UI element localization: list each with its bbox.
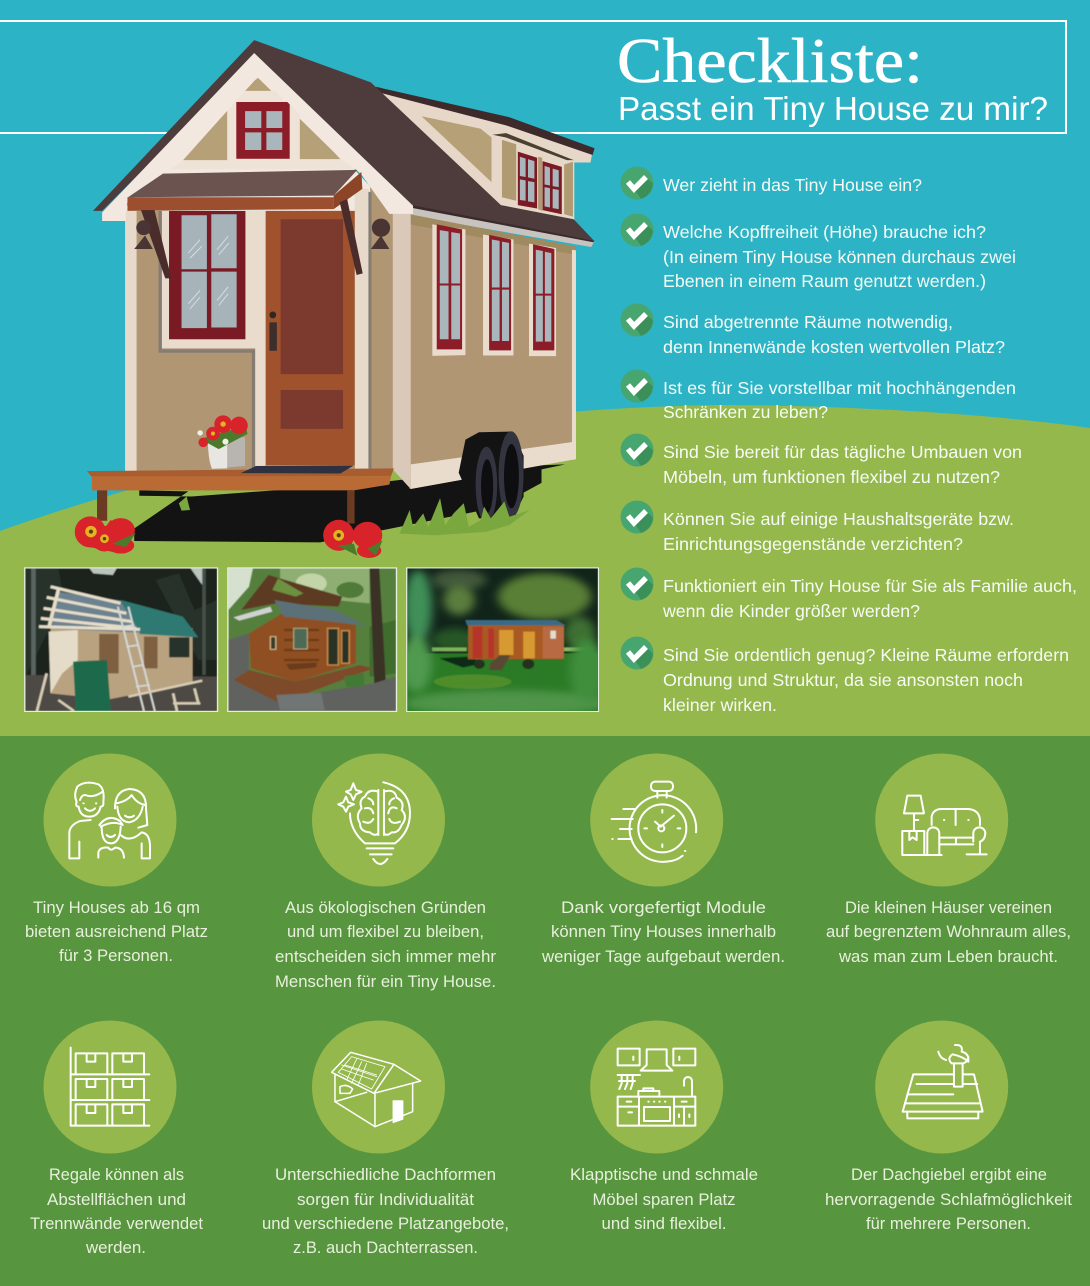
dormer backing bbox=[371, 82, 592, 221]
text: family: bieten ausreichend Platz bbox=[25, 922, 208, 941]
background: green hill bbox=[0, 405, 1090, 740]
checklist item 6 bbox=[620, 500, 1014, 554]
text: stopwatch: weniger Tage aufgebaut werden. bbox=[541, 947, 785, 966]
checklist item 8: Sind Sie ordentlich genug? Kleine Räume erfordern bbox=[663, 645, 1069, 665]
checklist item 5: Möbeln, um funktionen flexibel zu nutzen? bbox=[663, 467, 1000, 487]
porch deck bbox=[87, 465, 394, 523]
checklist item 3 bbox=[620, 304, 1005, 357]
icon: kitchen bbox=[590, 1020, 723, 1154]
text: kitchen: Klapptische und schmale bbox=[570, 1165, 758, 1184]
text: brain light bulb: Aus ökologischen Gründen bbox=[285, 898, 486, 917]
title: Checkliste: bbox=[617, 25, 923, 96]
checklist item 3: denn Innenwände kosten wertvollen Platz? bbox=[663, 337, 1005, 357]
red flowers right bbox=[323, 520, 383, 558]
checklist item 1 bbox=[620, 166, 922, 200]
checklist item 2: (In einem Tiny House können durchaus zwei bbox=[663, 247, 1016, 267]
checklist item 2: Ebenen in einem Raum genutzt werden.) bbox=[663, 271, 986, 291]
text: brain light bulb: und um flexibel zu bleiben, bbox=[287, 922, 484, 941]
checklist item 5 bbox=[620, 434, 1022, 487]
text: family: für 3 Personen. bbox=[59, 946, 173, 965]
photo: house under construction bbox=[24, 567, 218, 712]
icon: brain light bulb bbox=[312, 754, 445, 886]
attic window bbox=[236, 102, 290, 159]
photo: wooden cabin in the forest bbox=[227, 567, 397, 712]
text: stopwatch: können Tiny Houses innerhalb bbox=[551, 922, 776, 941]
text: roof with chimney bbox=[825, 1165, 1072, 1233]
gable beams bbox=[163, 91, 356, 169]
dormer under-eave line bbox=[492, 133, 574, 160]
checklist item 4: Schränken zu leben? bbox=[663, 402, 828, 422]
text: storage shelves: Regale können als bbox=[49, 1165, 184, 1184]
checklist item 2 bbox=[620, 214, 1016, 291]
text: lamp and sofa bbox=[826, 898, 1071, 966]
background: dark green lower panel bbox=[0, 736, 1090, 1286]
door bbox=[266, 210, 355, 465]
checklist item 6: Können Sie auf einige Haushaltsgeräte bzw. bbox=[663, 509, 1014, 529]
dormer front wall bbox=[502, 140, 573, 217]
ground shadow bbox=[134, 464, 565, 542]
main roof bbox=[93, 40, 595, 241]
checklist item 4: Ist es für Sie vorstellbar mit hochhängenden bbox=[663, 378, 1016, 398]
dormer side wall bbox=[422, 116, 491, 182]
checklist item 1: Wer zieht in das Tiny House ein? bbox=[663, 175, 922, 195]
checklist item 6: Einrichtungsgegenstände verzichten? bbox=[663, 534, 963, 554]
text: kitchen bbox=[570, 1165, 758, 1233]
checklist item 8: Ordnung und Struktur, da sie ansonsten noch bbox=[663, 670, 1023, 690]
checklist item 7: wenn die Kinder größer werden? bbox=[662, 601, 920, 621]
text: house with solar roof: sorgen für Individualität bbox=[297, 1190, 474, 1209]
text: roof with chimney: hervorragende Schlafmöglichkeit bbox=[825, 1190, 1072, 1209]
text: kitchen: und sind flexibel. bbox=[602, 1214, 726, 1233]
gable fill bbox=[178, 77, 345, 164]
icon: house with solar roof bbox=[312, 1020, 445, 1154]
grass tuft bbox=[400, 498, 530, 535]
side eave strip bbox=[408, 205, 595, 247]
text: roof with chimney: für mehrere Personen. bbox=[866, 1214, 1031, 1233]
icon: roof with chimney bbox=[875, 1020, 1008, 1154]
text: brain light bulb bbox=[275, 898, 496, 991]
dormer roof edge bbox=[376, 87, 595, 155]
title frame bbox=[0, 21, 1066, 133]
checklist item 8: kleiner wirken. bbox=[663, 695, 777, 715]
checklist item 2: Welche Kopffreiheit (Höhe) brauche ich? bbox=[663, 222, 986, 242]
text: lamp and sofa: was man zum Leben braucht. bbox=[838, 947, 1058, 966]
front window trim bbox=[159, 211, 255, 468]
right door post bbox=[355, 189, 371, 469]
illustration: tiny house bbox=[75, 40, 595, 558]
text: house with solar roof: z.B. auch Dachterrassen. bbox=[293, 1238, 478, 1257]
icon: storage shelves bbox=[44, 1020, 176, 1154]
trailer wheels bbox=[459, 431, 524, 522]
checklist item 4 bbox=[620, 370, 1016, 422]
checklist item 3: Sind abgetrennte Räume notwendig, bbox=[663, 312, 953, 332]
text: kitchen: Möbel sparen Platz bbox=[592, 1190, 736, 1209]
title: Passt ein Tiny House zu mir? bbox=[618, 91, 1048, 128]
photo: wagon house on lawn seen through foliage bbox=[401, 567, 607, 717]
checklist item 8 bbox=[620, 636, 1069, 715]
gable backing bbox=[121, 64, 394, 213]
text: roof with chimney: Der Dachgiebel ergibt eine bbox=[851, 1165, 1047, 1184]
text: house with solar roof: Unterschiedliche Dachformen bbox=[275, 1165, 496, 1184]
text: stopwatch: Dank vorgefertigt Module bbox=[561, 898, 766, 917]
red flowers left bbox=[75, 516, 136, 554]
side windows bbox=[432, 224, 556, 356]
text: house with solar roof bbox=[262, 1165, 509, 1257]
flower pot bbox=[197, 415, 248, 469]
text: lamp and sofa: Die kleinen Häuser vereinen bbox=[845, 898, 1052, 917]
text: family bbox=[25, 898, 208, 965]
text: lamp and sofa: auf begrenztem Wohnraum alles, bbox=[826, 922, 1071, 941]
wall lamps bbox=[134, 219, 390, 249]
title bbox=[617, 25, 1048, 128]
front window bbox=[169, 211, 245, 339]
text: brain light bulb: Menschen für ein Tiny House. bbox=[275, 972, 496, 991]
checklist bbox=[620, 166, 1077, 715]
porch roof bbox=[127, 170, 362, 211]
gable fascia bbox=[102, 53, 413, 221]
text: brain light bulb: entscheiden sich immer mehr bbox=[275, 947, 496, 966]
text: stopwatch bbox=[541, 898, 785, 966]
text: house with solar roof: und verschiedene Platzangebote, bbox=[262, 1214, 509, 1233]
text: storage shelves: werden. bbox=[85, 1238, 146, 1257]
icon: family bbox=[44, 754, 176, 886]
text: storage shelves: Abstellflächen und bbox=[47, 1190, 186, 1209]
wall patch beside door post bbox=[370, 186, 391, 215]
checklist item 5: Sind Sie bereit für das tägliche Umbauen von bbox=[663, 442, 1022, 462]
icon: lamp and sofa bbox=[875, 754, 1008, 886]
icon: stopwatch bbox=[590, 754, 723, 886]
porch brackets bbox=[141, 199, 363, 278]
text: storage shelves: Trennwände verwendet bbox=[30, 1214, 203, 1233]
corner post bbox=[393, 213, 411, 489]
checklist item 7: Funktioniert ein Tiny House für Sie als Familie auch, bbox=[663, 576, 1077, 596]
side wall bbox=[410, 214, 575, 489]
checklist item 7 bbox=[620, 568, 1077, 621]
text: family: Tiny Houses ab 16 qm bbox=[33, 898, 200, 917]
text: storage shelves bbox=[30, 1165, 203, 1257]
front wall bbox=[125, 211, 394, 471]
